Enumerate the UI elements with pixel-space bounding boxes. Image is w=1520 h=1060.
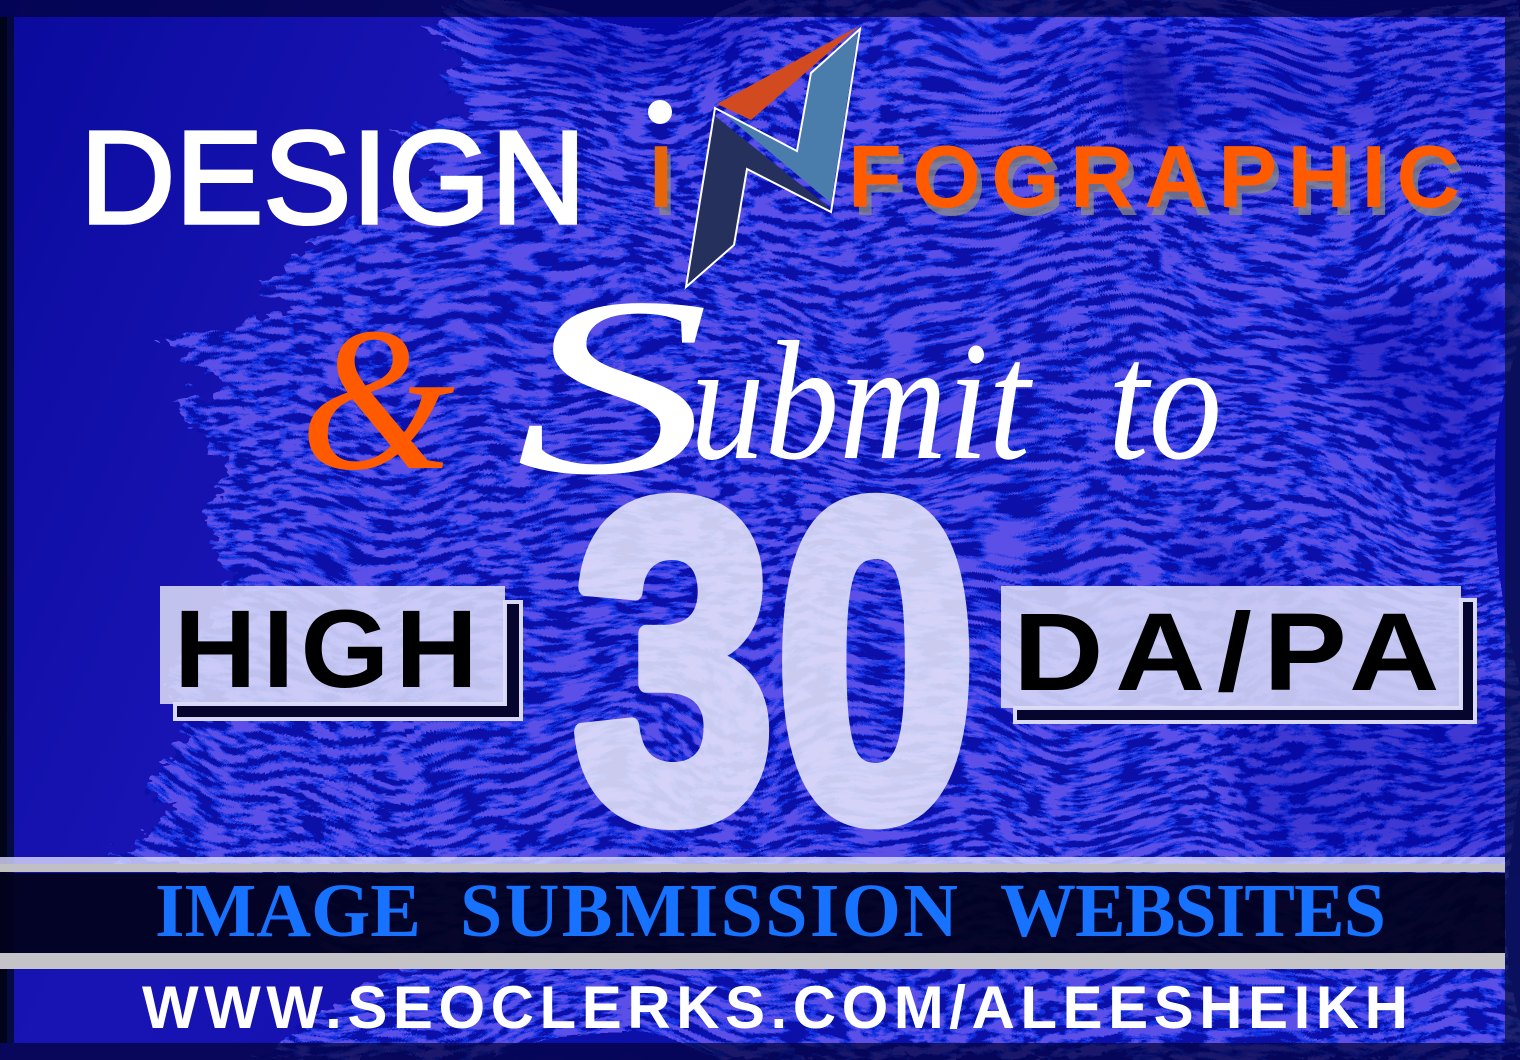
text: Submit to: to [1108, 307, 1222, 495]
heading: DESIGN: DESIGN [80, 104, 586, 251]
banner: image submission websites: WEBSITES [1000, 869, 1386, 953]
icon: N logo [686, 26, 860, 287]
heading: INFOGRAPHIC: I [649, 127, 673, 226]
heading: INFOGRAPHIC [649, 127, 1465, 234]
banner: image submission websites [0, 857, 1505, 969]
text: Submit to: ubmit [690, 307, 1033, 495]
text: Submit to: S [515, 246, 710, 528]
label: HIGH: HIGH [174, 588, 484, 711]
label: DA/PA: DA/PA [1013, 591, 1451, 714]
big number 30: 30 [573, 410, 977, 912]
text: Submit to [515, 246, 1222, 528]
heading: INFOGRAPHIC: FOGRAPHIC [848, 127, 1460, 226]
text: website url: WWW.SEOCLERKS.COM/ALEESHEIKH [142, 974, 1408, 1041]
banner: image submission websites: IMAGE [155, 869, 421, 953]
banner: image submission websites: SUBMISSION [460, 869, 958, 953]
heading: INFOGRAPHIC: I [654, 135, 676, 234]
heading: INFOGRAPHIC: FOGRAPHIC [853, 135, 1465, 234]
icon: dot of i [648, 100, 672, 124]
text: ampersand: & [300, 286, 455, 513]
